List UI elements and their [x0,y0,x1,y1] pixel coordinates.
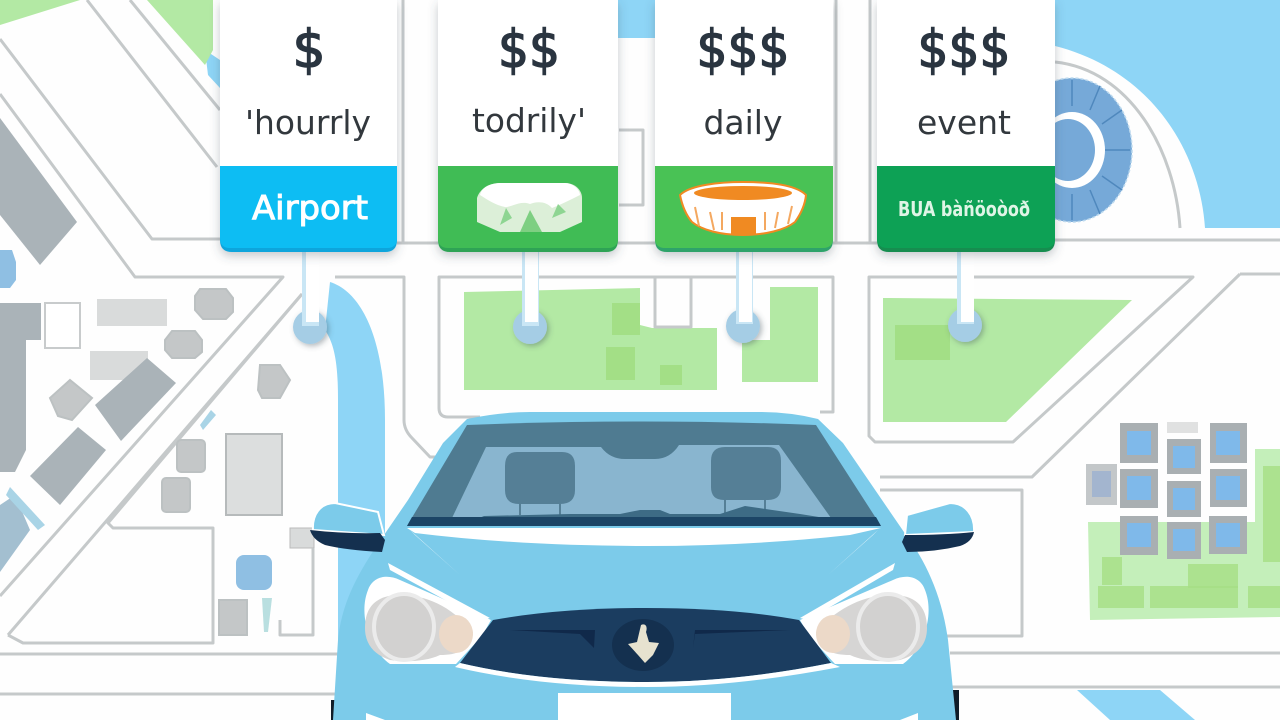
rate label: todrily: todrily' [472,101,586,140]
left seat [505,452,575,515]
right seat [711,447,781,513]
price: three dollars: $$$ [918,20,1010,80]
number plate [558,693,731,720]
rate label: hourly: 'hourrly [245,103,371,142]
windshield [407,422,881,526]
price: one dollar: $ [292,20,326,80]
label: garbled venue text: BUA bàñöoòoð [898,197,1030,221]
grille [455,608,840,687]
hood creases [388,530,895,620]
label: Airport: Airport [252,188,368,227]
hood highlight [407,528,881,546]
pin: daily [726,248,760,343]
panel: second price card [438,0,618,252]
panel: daily price card [655,0,833,252]
rate label: event: event [917,103,1011,142]
price: two dollars: $$ [498,20,560,80]
buildings: west block [0,118,314,635]
park details [606,303,1280,608]
panel: event price card [877,0,1055,252]
emblem [612,619,674,671]
rate label: daily: daily [703,103,783,142]
car: front view [310,412,974,720]
left headlight [364,577,491,664]
panel: airport price card [220,0,397,252]
pin: todrily [513,248,547,344]
icon: white stadium bowl [477,183,582,232]
right headlight [800,577,929,664]
pin: event [948,248,982,342]
price: three dollars: $$$ [696,20,790,80]
car body [333,412,956,720]
buildings: east solar grid [1086,422,1247,559]
pin: hourly [293,248,327,344]
left mirror [310,503,385,552]
lower bumper highlights [366,713,918,720]
car tyres [331,690,959,720]
icon: orange stadium [680,182,806,235]
right mirror [902,503,974,552]
stadium landmark [1012,78,1132,222]
